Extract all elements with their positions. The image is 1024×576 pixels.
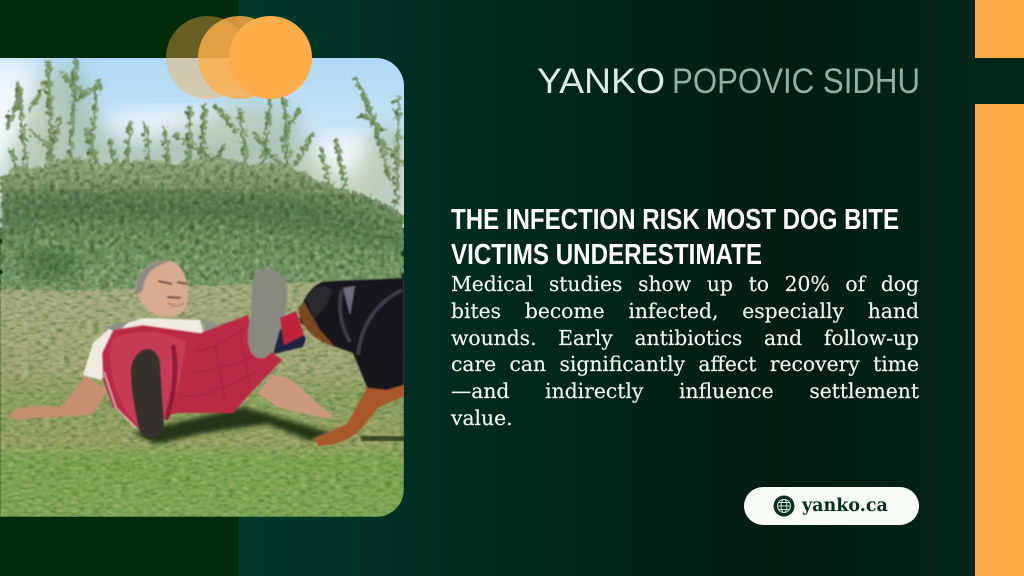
orange accent bar: right side	[975, 104, 1024, 576]
body text: care can significantly affect recovery time	[451, 352, 919, 376]
body text	[450, 272, 919, 430]
logo: Yanko Popovic Sidhu	[537, 62, 920, 100]
grass field	[0, 280, 404, 517]
website address: yanko.ca	[802, 496, 888, 516]
reeds haze	[0, 70, 404, 240]
left dark background block	[0, 0, 239, 576]
dog	[273, 278, 404, 446]
dark foliage band	[0, 194, 404, 250]
ground shadow	[133, 407, 333, 444]
heading	[451, 204, 899, 271]
man: red padded suit	[102, 315, 282, 428]
man	[10, 260, 333, 439]
body text: —and indirectly influence settlement	[451, 379, 919, 403]
decorative solid circle: front	[229, 16, 312, 99]
body text: Medical studies show up to 20% of dog	[451, 272, 919, 296]
man: left arm	[10, 375, 107, 420]
heading: VICTIMS UNDERESTIMATE	[451, 239, 762, 271]
man: right sole	[248, 269, 287, 358]
decorative translucent circle: back	[166, 16, 249, 99]
body text: value.	[451, 406, 513, 430]
man: left sole	[131, 349, 164, 439]
photo: man on grass with dog biting padded sleeve	[0, 58, 404, 517]
man: head	[135, 260, 188, 317]
icon: globe	[774, 496, 794, 516]
website pill	[744, 487, 919, 525]
logo: Yanko Popovic Sidhu: YANKO	[537, 62, 665, 100]
man: right arm	[257, 375, 333, 418]
body text: bites become infected, especially hand	[451, 299, 919, 323]
orange accent bar: top right	[975, 0, 1024, 58]
reeds and bushes	[0, 60, 404, 300]
body text: wounds. Early antibiotics and follow-up	[451, 326, 919, 350]
decorative translucent circle: middle	[198, 16, 281, 99]
sky	[0, 50, 404, 228]
man: shirt	[83, 318, 204, 380]
